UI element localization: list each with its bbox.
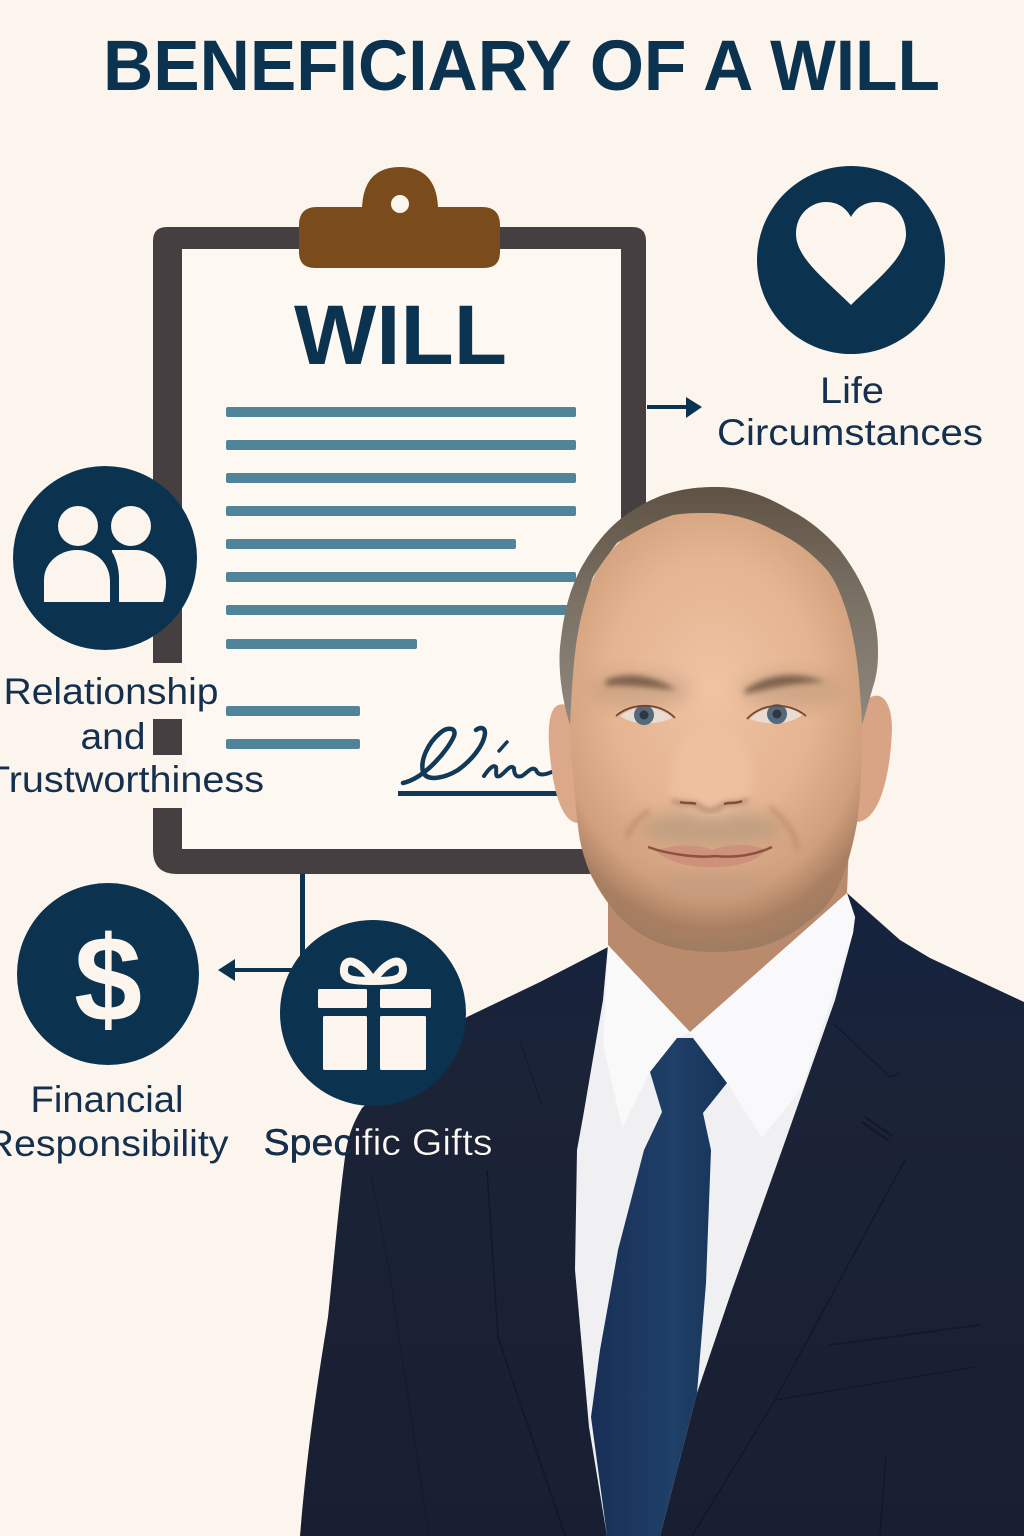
- eyes: [616, 704, 806, 725]
- nose: [668, 735, 750, 810]
- icon: gift: [280, 920, 466, 1106]
- icon: people: [13, 466, 197, 650]
- arrow: document to life circumstances: [647, 397, 702, 418]
- label: life circumstances: Life: [820, 370, 884, 411]
- suit seams: [371, 1023, 980, 1536]
- label: relationship and trustworthiness: and: [80, 716, 146, 757]
- collar left: [603, 945, 690, 1128]
- label: life circumstances: Circumstances: [717, 412, 983, 453]
- figure: man in suit: [300, 487, 1024, 1536]
- shirt: [575, 893, 855, 1536]
- label: financial responsibility: Financial: [30, 1079, 184, 1120]
- tie: [591, 1038, 727, 1536]
- document heading: WILL: [294, 288, 507, 382]
- icon: dollar: $: [74, 911, 142, 1047]
- ears: [549, 704, 585, 823]
- collar right: [690, 893, 855, 1138]
- title: BENEFICIARY OF A WILL: [103, 27, 940, 106]
- suit jacket: [300, 893, 1024, 1536]
- clipboard clip: [299, 167, 500, 268]
- document paper: [182, 249, 621, 849]
- label: relationship and trustworthiness: Relationship: [4, 671, 218, 712]
- icon: dollar: [17, 883, 199, 1065]
- hair: [559, 487, 878, 725]
- connector: document to financial and gifts: [218, 874, 305, 981]
- label: financial responsibility: [0, 1079, 229, 1164]
- label: life circumstances: [717, 370, 983, 453]
- icon: heart: [757, 166, 945, 354]
- facial shading: [590, 672, 845, 960]
- label: specific gifts: Specific Gifts: [264, 1122, 492, 1163]
- label: relationship and trustworthiness: [0, 671, 264, 800]
- gap in board behind label: [150, 663, 186, 808]
- clipboard board: [153, 227, 646, 874]
- eyebrows: [606, 675, 825, 694]
- document text lines: [226, 407, 576, 749]
- signature: [398, 728, 560, 794]
- smile lines: [627, 807, 797, 850]
- mouth: [648, 845, 772, 867]
- face: [570, 500, 862, 952]
- panel: will document on clipboard: [150, 167, 646, 874]
- neck: [608, 820, 850, 1032]
